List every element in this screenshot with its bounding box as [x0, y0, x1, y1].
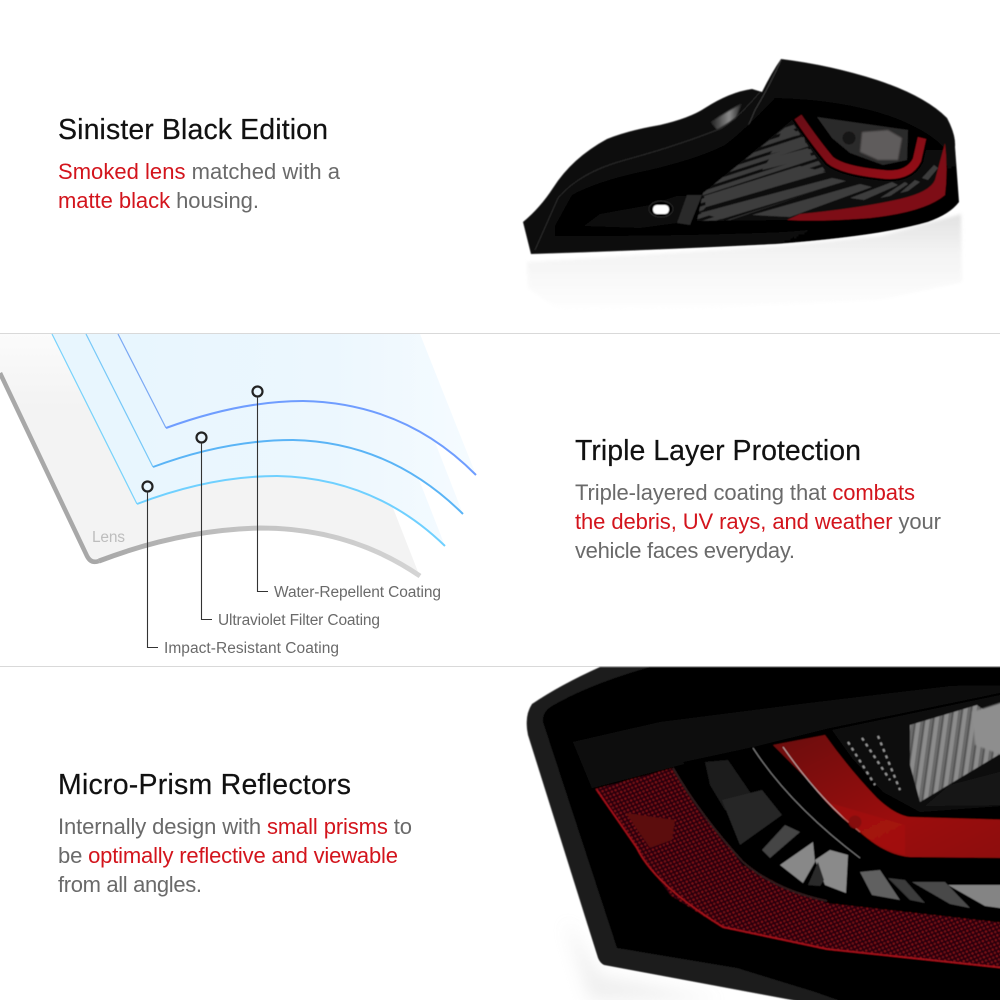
callout: water-repellent coating: Water-Repellent Coating [274, 584, 441, 601]
text block: coating description [575, 480, 941, 563]
text block: smoked lens description: matte black housing. [58, 188, 259, 213]
image: full tail light in smoked black [523, 59, 962, 312]
soft shadow below lamp [565, 920, 720, 1000]
gray grommet [677, 195, 702, 225]
upper flange highlight [710, 103, 742, 130]
coating layer 2: ultraviolet filter [86, 334, 463, 514]
text block: prism description: from all angles. [58, 872, 202, 897]
housing outer edge [527, 667, 1000, 1000]
tail light housing [523, 59, 959, 254]
inner dark lens band [555, 98, 950, 236]
heading: Triple Layer Protection: Triple Layer Protection [575, 435, 861, 467]
heading: Micro-Prism Reflectors: Micro-Prism Reflectors [58, 769, 351, 801]
text block: prism description: be optimally reflective and viewable [58, 843, 398, 868]
panel: Micro-Prism Reflectors [58, 667, 1000, 1000]
callout: water-repellent coating [252, 386, 441, 601]
text block: smoked lens description [58, 159, 341, 213]
lens prism streaks [848, 698, 1000, 806]
lens layer [0, 334, 420, 577]
divider [0, 666, 1000, 667]
red micro-prism reflector [595, 768, 1000, 969]
panel: Sinister Black Edition [58, 59, 962, 312]
text block: prism description [58, 814, 412, 897]
text block: prism description: Internally design with small prisms to [58, 814, 412, 839]
smoked slat area [683, 747, 1000, 914]
red LED band [753, 735, 1000, 858]
callout: impact-resistant coating: Impact-Resistant Coating [164, 640, 339, 657]
white LED [649, 201, 673, 217]
text block: coating description: the debris, UV rays, and weather your [575, 509, 941, 534]
label: Lens: Lens [92, 529, 125, 546]
reverse lens highlight [860, 130, 902, 160]
thin gray trim lines [535, 92, 760, 250]
text block: coating description: Triple-layered coating that combats [575, 480, 915, 505]
text block: smoked lens description: Smoked lens matched with a [58, 159, 341, 184]
text block: coating description: vehicle faces everyday. [575, 538, 795, 563]
diagram: lens and coating layers [0, 334, 476, 657]
panel: Triple Layer Protection [0, 334, 941, 657]
red LED ring [798, 117, 922, 175]
housing inner black [543, 667, 1000, 1000]
fan of smoked reflector slats [697, 120, 943, 221]
callout: impact-resistant coating [142, 482, 339, 657]
coating layer 1: impact-resistant [52, 334, 445, 546]
side reflector cutout [584, 196, 687, 228]
reflection below the tail light [527, 214, 962, 312]
callout: ultraviolet filter coating: Ultraviolet Filter Coating [218, 612, 380, 629]
smoked reverse lens close-up [832, 692, 1000, 812]
divider [0, 333, 1000, 334]
callout: ultraviolet filter coating [196, 432, 380, 629]
smoked reverse lens [817, 117, 908, 165]
image: tail light close-up [527, 667, 1000, 1000]
upper band [573, 678, 1000, 788]
heading: Sinister Black Edition: Sinister Black Edition [58, 114, 328, 146]
coating layer 3: water-repellent [118, 334, 476, 475]
lower red strip [787, 143, 946, 221]
